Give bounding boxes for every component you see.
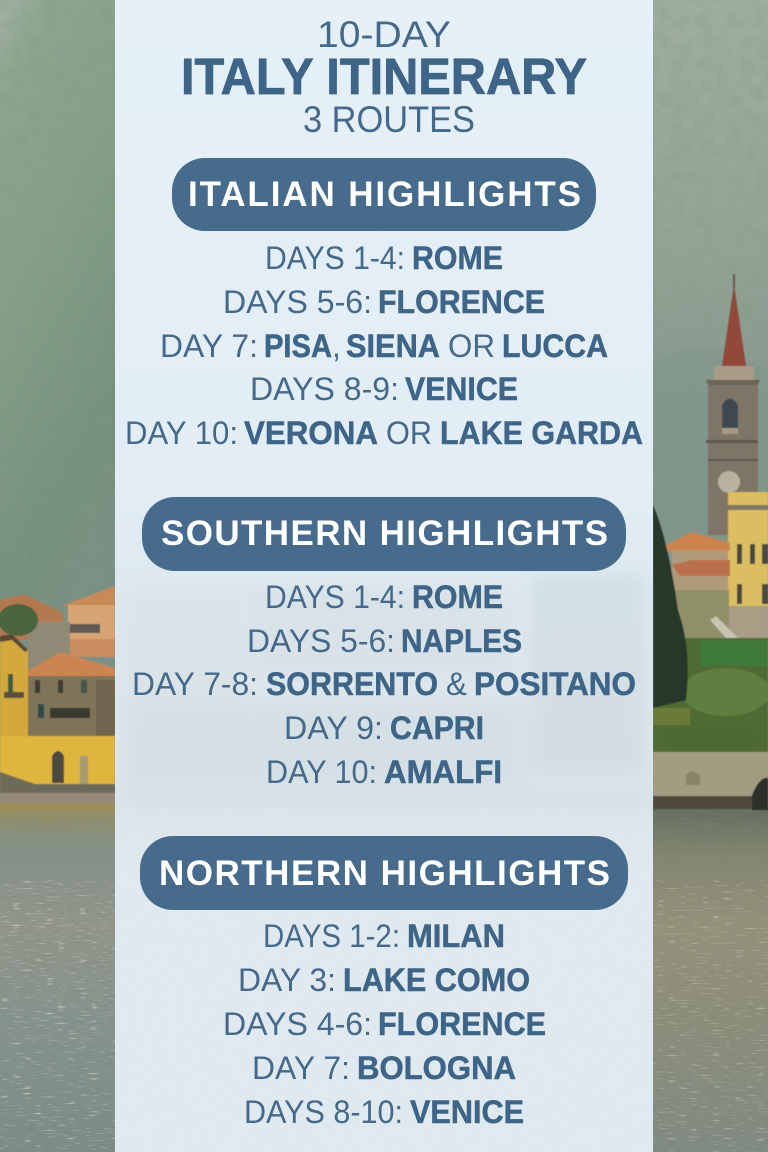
stop list: DAYS 4-6: <box>223 1006 372 1042</box>
stop list: VENICE <box>410 1094 524 1130</box>
stop list: POSITANO <box>474 666 636 702</box>
stop list: MILAN <box>407 918 505 954</box>
stop list: SIENA <box>346 328 440 364</box>
faded town behind panel <box>125 575 645 804</box>
stop list: DAYS 5-6: <box>223 284 372 320</box>
pill heading: ITALIAN HIGHLIGHTS <box>188 175 581 214</box>
stop list: FLORENCE <box>378 1006 546 1042</box>
stop list: LAKE COMO <box>343 962 530 998</box>
route: Italian Highlights <box>125 158 643 451</box>
stop list: DAY 7-8: <box>132 666 258 702</box>
pill heading <box>142 497 626 571</box>
stop list: VENICE <box>405 371 518 407</box>
stop list: ROME <box>412 579 503 615</box>
stop list: BOLOGNA <box>357 1050 516 1086</box>
stop list <box>132 579 636 790</box>
stop list: DAYS 1-4: <box>265 579 405 615</box>
stop list: DAYS 8-10: <box>244 1094 403 1130</box>
left town buildings <box>0 586 115 803</box>
pill heading: NORTHERN HIGHLIGHTS <box>159 854 610 893</box>
stop list: DAY 7: <box>252 1050 350 1086</box>
title: ITALY ITINERARY <box>181 48 587 105</box>
stop list: DAY 10: <box>125 415 238 451</box>
stop list: NAPLES <box>401 623 522 659</box>
stop list: LAKE GARDA <box>440 415 643 451</box>
stop list: PISA <box>264 328 332 364</box>
stop list <box>125 240 643 451</box>
stop list: DAY 9: <box>284 710 383 746</box>
stop list: AMALFI <box>384 754 502 790</box>
stop list: VERONA <box>244 415 378 451</box>
stop list: ROME <box>412 240 503 276</box>
pill heading <box>140 836 628 910</box>
title: 10-DAY <box>317 14 451 55</box>
stop list: OR <box>386 415 432 451</box>
stop list: DAYS 1-2: <box>263 918 400 954</box>
stop list: CAPRI <box>390 710 484 746</box>
stop list: SORRENTO <box>266 666 438 702</box>
stop list: DAY 3: <box>238 962 336 998</box>
stop list: DAY 7: <box>160 328 258 364</box>
stop list: , <box>332 328 341 364</box>
stop list: LUCCA <box>502 328 608 364</box>
stop list: OR <box>448 328 495 364</box>
lake water <box>0 803 768 1152</box>
translucent content panel <box>115 0 653 1152</box>
title <box>181 14 587 140</box>
route: Southern Highlights <box>132 497 636 790</box>
right villa and garden <box>653 492 768 810</box>
stop list <box>223 918 546 1130</box>
pill heading <box>172 158 596 231</box>
stop list: DAYS 5-6: <box>247 623 395 659</box>
bell tower <box>706 274 760 535</box>
stop list: DAYS 1-4: <box>265 240 405 276</box>
title: 3 ROUTES <box>303 99 475 140</box>
stop list: & <box>446 666 467 702</box>
stop list: DAY 10: <box>266 754 377 790</box>
stop list: FLORENCE <box>378 284 545 320</box>
route: Northern Highlights <box>140 836 628 1130</box>
pill heading: SOUTHERN HIGHLIGHTS <box>161 514 608 553</box>
stop list: DAYS 8-9: <box>250 371 399 407</box>
